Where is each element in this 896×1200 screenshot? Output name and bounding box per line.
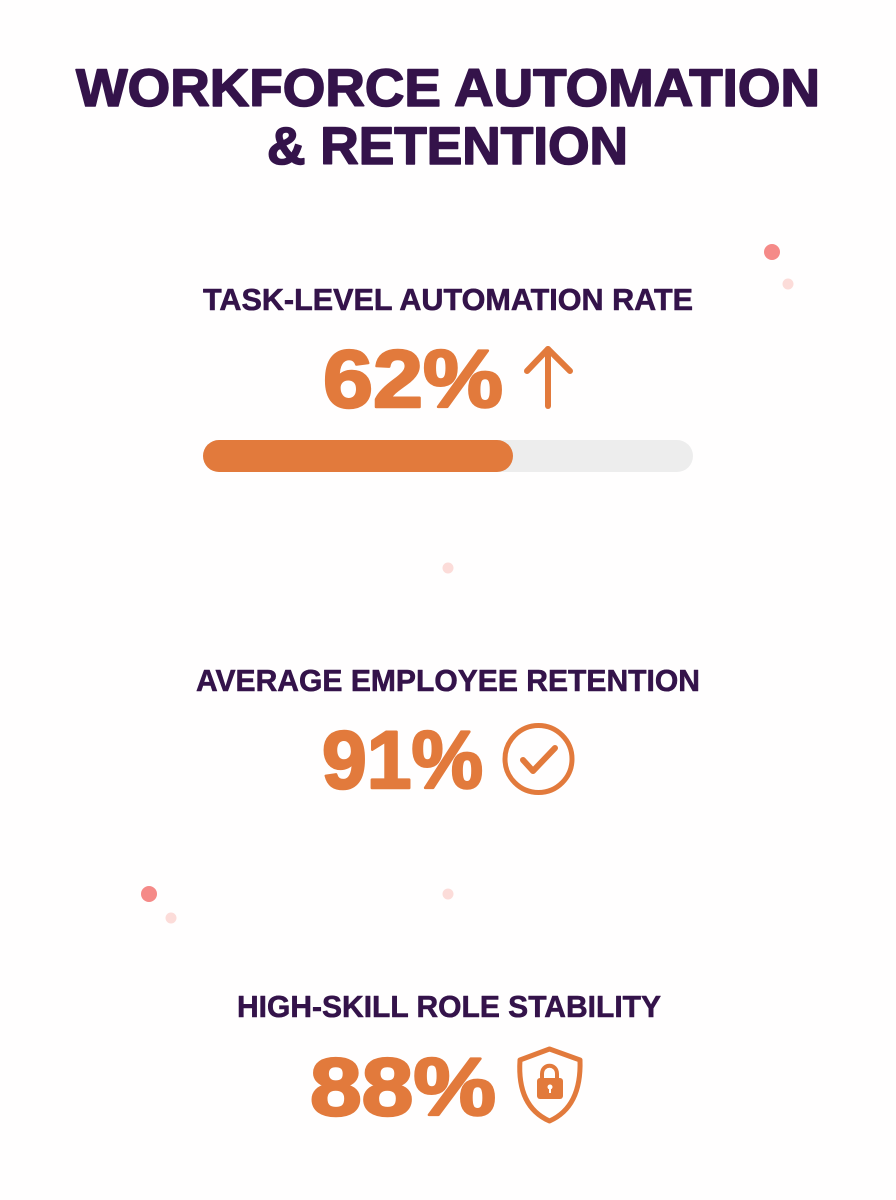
decorative dot: top right large [764,244,780,260]
heading: average employee retention: AVERAGE EMPLOYEE RETENTION [196,663,700,698]
value: 91%: 91% [322,715,483,806]
progress bar [203,440,693,472]
value: 62%: 62% [323,334,503,425]
title: & RETENTION [267,117,628,176]
panel: task-level automation rate [203,282,693,472]
panel: high-skill role stability [237,989,661,1133]
icon: check circle [505,726,572,792]
decorative dot: lower left small [166,912,176,924]
heading: high-skill role stability: HIGH-SKILL ROLE STABILITY [237,989,661,1024]
decorative dot: top right small [782,278,794,290]
decorative dot: middle [442,562,454,574]
value: 88%: 88% [310,1042,496,1133]
title: WORKFORCE AUTOMATION [76,59,820,118]
decorative dot: lower middle [442,888,454,900]
title [76,59,820,176]
icon: up arrow [527,349,570,406]
icon: shield with lock [520,1049,580,1121]
decorative dot: lower left large [141,886,157,902]
panel: average employee retention [196,663,700,806]
heading: task-level automation rate: TASK-LEVEL AUTOMATION RATE [203,282,693,317]
